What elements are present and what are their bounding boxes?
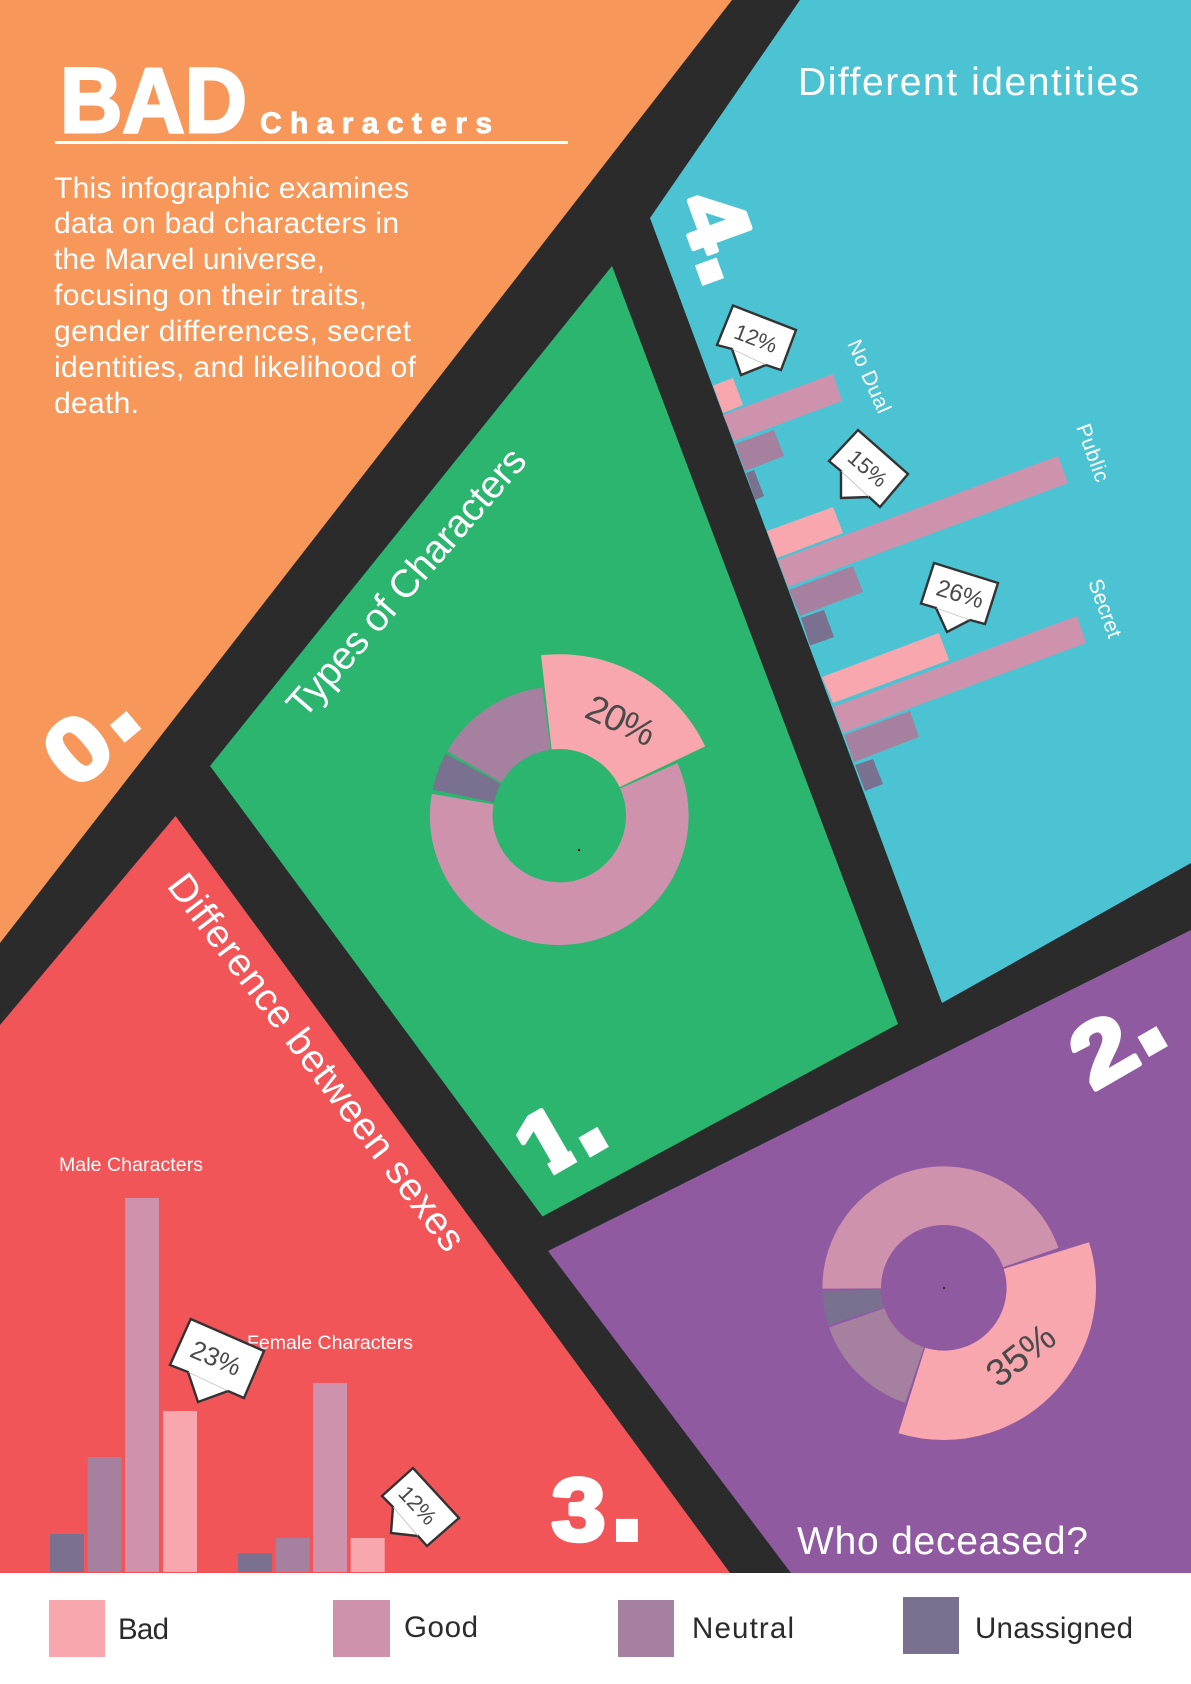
callout: 15% public: 15%	[843, 444, 892, 492]
number 2: .	[1070, 920, 1191, 1091]
number 3: 3	[552, 1460, 605, 1559]
title	[55, 50, 568, 152]
number 0: 0	[25, 693, 132, 805]
callout: 12% no dual	[717, 306, 796, 375]
panel 0: intro	[0, 0, 732, 943]
intro text block: death.	[54, 387, 139, 420]
legend	[0, 1573, 1191, 1684]
donut chart: deceased	[809, 1153, 1078, 1422]
panel 4: different identities	[650, 0, 1191, 1003]
donut chart: deceased: 35%	[978, 1316, 1064, 1396]
bar chart: female characters	[238, 1332, 413, 1572]
callout: 15% public	[829, 430, 908, 507]
intro text block: the Marvel universe,	[54, 243, 325, 276]
number 3	[552, 1402, 649, 1575]
heading: types of characters: Types of Characters	[278, 440, 535, 726]
legend item: neutral	[618, 1600, 794, 1657]
number 0: .	[27, 615, 171, 775]
intro text block	[54, 172, 417, 420]
bar chart: female characters: Female Characters	[247, 1332, 413, 1354]
panel 3: difference between sexes	[0, 816, 730, 1575]
legend item: bad: Bad	[118, 1613, 169, 1646]
number 4: 4	[659, 177, 771, 265]
intro text block: focusing on their traits,	[54, 279, 367, 312]
panel 1: types of characters	[210, 266, 898, 1216]
bar group: no dual: No Dual	[842, 336, 895, 417]
legend item: good: Good	[404, 1611, 478, 1644]
number 1	[516, 1108, 609, 1176]
donut chart: types: 20%	[579, 687, 662, 754]
title: BAD	[60, 50, 247, 152]
bar group: secret	[822, 576, 1126, 791]
intro text block: gender differences, secret	[54, 315, 412, 348]
number 1: .	[511, 1020, 635, 1192]
heading: difference between sexes: Difference between sexes	[159, 865, 474, 1260]
callout: 12% female: 12%	[393, 1481, 442, 1530]
number 1: 1	[499, 1085, 598, 1199]
bar group: public	[767, 421, 1113, 646]
number 2: 2	[1054, 994, 1153, 1108]
donut chart: types	[425, 682, 693, 950]
panel 2: who deceased	[548, 920, 1191, 1573]
bar group: no dual	[713, 336, 895, 500]
number 3: .	[605, 1402, 649, 1575]
heading: different identities: Different identities	[798, 61, 1139, 104]
bar group: secret: Secret	[1083, 576, 1126, 641]
intro text block: identities, and likelihood of	[54, 351, 417, 384]
heading: who deceased: Who deceased?	[797, 1520, 1088, 1563]
bar chart: male characters: Male Characters	[59, 1154, 203, 1176]
title: Characters	[260, 107, 492, 140]
number 4: .	[660, 208, 838, 307]
callout: 23% male	[170, 1319, 264, 1402]
intro text block: data on bad characters in	[54, 207, 399, 240]
legend item: unassigned	[903, 1597, 1133, 1654]
callout: 26% secret: 26%	[933, 575, 987, 614]
bar group: public: Public	[1071, 421, 1113, 485]
intro text block: This infographic examines	[54, 172, 409, 205]
callout: 12% no dual: 12%	[731, 319, 781, 358]
callout: 12% female	[382, 1468, 459, 1546]
callout: 23% male: 23%	[186, 1334, 246, 1382]
legend item: neutral: Neutral	[692, 1612, 794, 1645]
callout: 26% secret	[921, 563, 998, 632]
bar chart: male characters	[50, 1154, 203, 1572]
legend item: bad	[49, 1600, 169, 1657]
legend item: good	[333, 1600, 478, 1657]
legend item: unassigned: Unassigned	[975, 1612, 1133, 1645]
